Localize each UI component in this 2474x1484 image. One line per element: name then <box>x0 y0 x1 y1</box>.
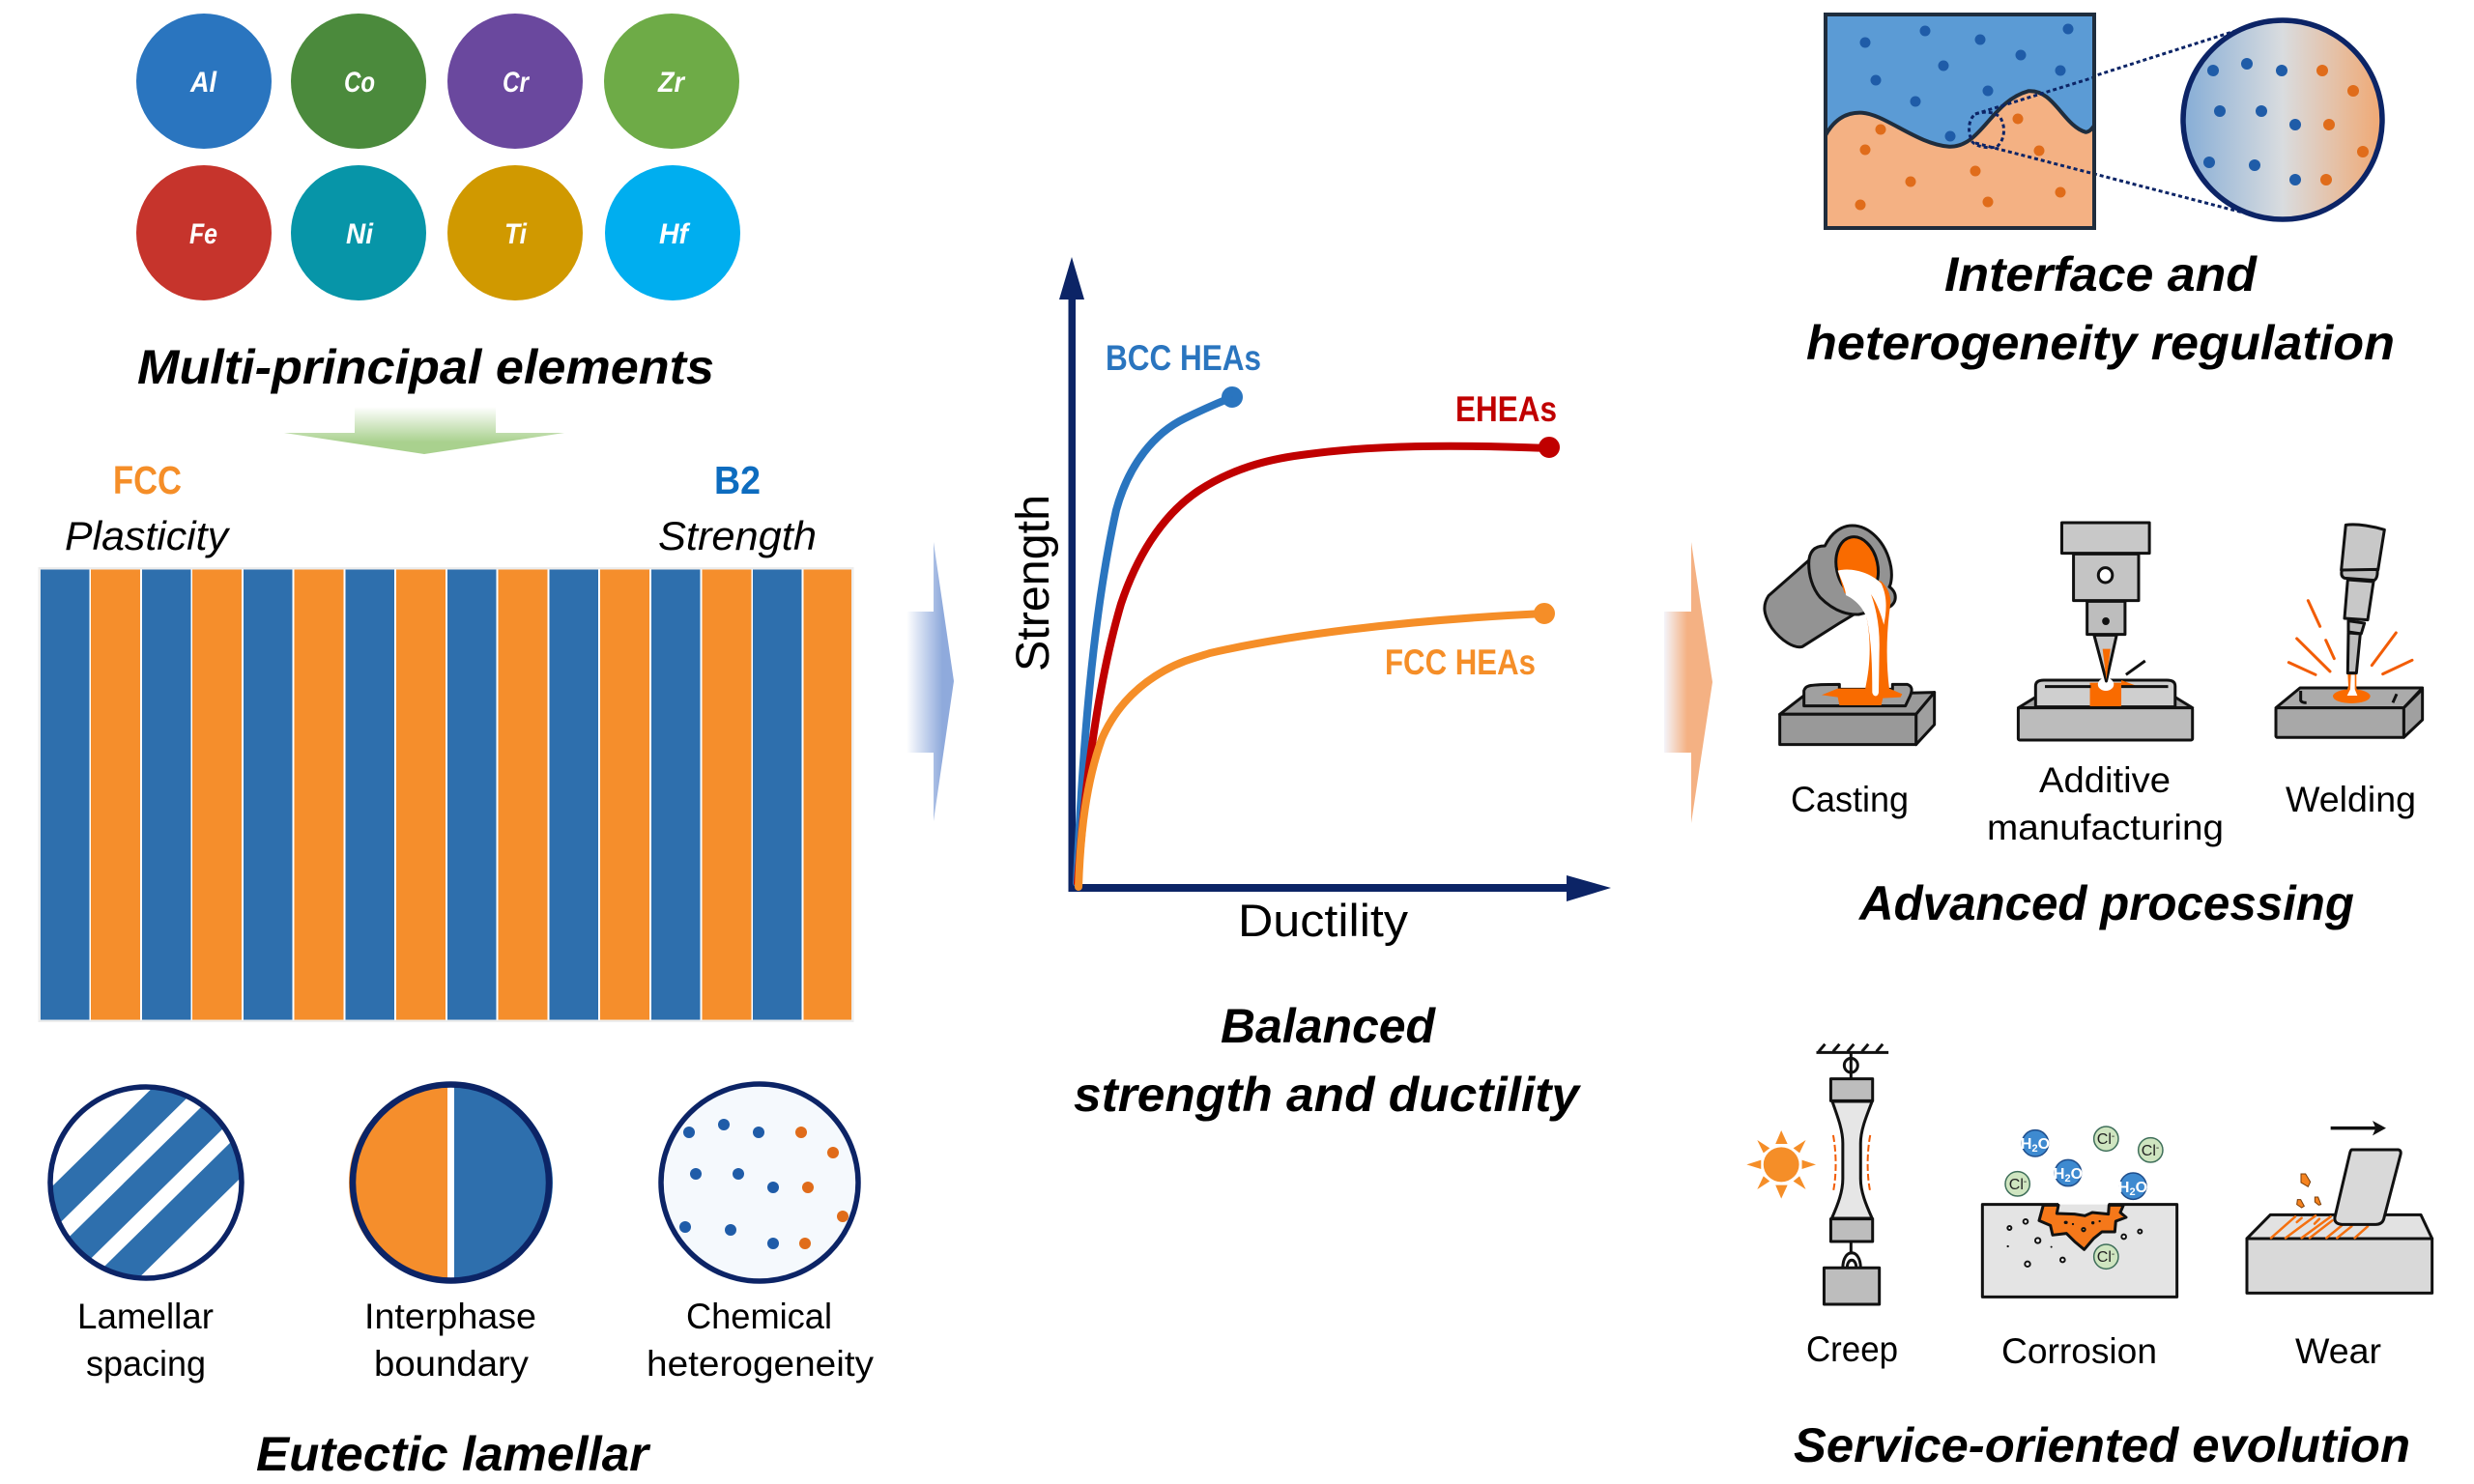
icon: corrosion: H <box>2021 1136 2031 1153</box>
icon: corrosion: O <box>2038 1136 2050 1153</box>
icon: wear <box>2247 1121 2432 1293</box>
label: Creep: Creep <box>1806 1329 1898 1369</box>
axis label: Ductility: Ductility <box>1238 895 1409 946</box>
curve: FCC HEAs <box>1079 609 1549 887</box>
label: Additive manufacturing: Additive <box>2039 760 2171 800</box>
arrow: orange right arrow <box>1664 542 1712 823</box>
label: FCC HEAs: FCC HEAs <box>1385 642 1536 682</box>
label: Lamellar spacing: spacing <box>86 1344 206 1384</box>
heading: eutectic lamellar: Eutectic lamellar <box>256 1427 651 1481</box>
icon: casting <box>1765 526 1935 745</box>
element circle: Zr: Zr <box>657 67 686 99</box>
panel: eutectic lamellar <box>0 458 875 1481</box>
arrow: blue right arrow <box>906 542 954 821</box>
icon: corrosion: - <box>2112 1249 2114 1260</box>
element circle: Co <box>291 14 426 149</box>
element circle: Ni <box>291 165 426 300</box>
element circle: Co: Co <box>344 67 375 99</box>
icon: corrosion: 2 <box>2064 1173 2071 1184</box>
zoomed interface circle <box>2183 20 2382 219</box>
element circle: Ni: Ni <box>346 218 374 250</box>
icon: additive manufacturing <box>2018 523 2193 740</box>
icon: corrosion: O <box>2136 1180 2147 1196</box>
interface box <box>1826 14 2094 228</box>
element circle: Ti: Ti <box>504 218 528 250</box>
lamellar stripes <box>39 567 854 1022</box>
icon: corrosion: Cl <box>2009 1177 2024 1193</box>
icon: lamellar spacing circle <box>47 1084 245 1281</box>
axis label: Strength: Strength <box>1008 495 1059 671</box>
icon: corrosion: 2 <box>2031 1143 2038 1155</box>
icon: corrosion: 2 <box>2129 1186 2136 1198</box>
element circle: Hf <box>605 165 740 300</box>
label: Welding: Welding <box>2286 780 2416 819</box>
element circle: Fe <box>136 165 272 300</box>
heading: balanced strength and ductility: Balanced <box>1221 999 1436 1053</box>
element circle: Al: Al <box>189 67 217 99</box>
panel: service-oriented evolution <box>1746 1044 2432 1472</box>
curve: EHEAs <box>1078 442 1554 883</box>
icon: corrosion: Cl <box>2142 1143 2156 1159</box>
icon: corrosion: Cl <box>2097 1131 2112 1148</box>
label: EHEAs: EHEAs <box>1455 389 1557 429</box>
icon: corrosion: Cl <box>2097 1249 2112 1266</box>
icon: corrosion: - <box>2024 1177 2027 1187</box>
icon: corrosion: - <box>2156 1143 2159 1154</box>
label: Additive manufacturing: manufacturing <box>1987 808 2224 847</box>
label: Chemical heterogeneity: heterogeneity <box>647 1344 875 1384</box>
heading: interface and heterogeneity regulation: heterogeneity regulation <box>1806 316 2395 370</box>
icon: corrosion <box>1982 1127 2177 1297</box>
heading: multi-principal elements: Multi-principal elements <box>137 340 714 394</box>
label: Interphase boundary: boundary <box>374 1344 530 1384</box>
label: Strength: Strength <box>658 513 817 558</box>
icon: creep <box>1746 1044 1888 1304</box>
element circle: Cr <box>447 14 583 149</box>
curve: BCC HEAs <box>1077 392 1237 883</box>
element circle: Hf: Hf <box>659 218 691 250</box>
label: Wear: Wear <box>2295 1331 2381 1371</box>
icon: corrosion: H <box>2118 1180 2129 1196</box>
arrow: green down arrow <box>284 407 564 454</box>
label: Chemical heterogeneity: Chemical <box>686 1297 832 1336</box>
heading: service-oriented evolution: Service-oriented evolution <box>1794 1418 2410 1472</box>
heading: advanced processing: Advanced processing <box>1857 876 2354 930</box>
icon: interphase boundary circle <box>349 1084 553 1281</box>
element circle: Fe: Fe <box>189 218 217 250</box>
label: FCC: FCC <box>113 458 182 502</box>
element circle: Cr: Cr <box>503 67 531 99</box>
panel: advanced processing <box>1765 523 2423 930</box>
label: BCC HEAs: BCC HEAs <box>1106 338 1261 378</box>
heading: interface and heterogeneity regulation: Interface and <box>1944 247 2258 301</box>
label: Lamellar spacing: Lamellar <box>77 1297 214 1336</box>
icon: corrosion: O <box>2071 1166 2083 1183</box>
icon: welding <box>2276 525 2423 737</box>
chart axes <box>1059 257 1611 901</box>
icon: corrosion: H <box>2054 1166 2064 1183</box>
label: B2: B2 <box>714 458 761 502</box>
heading: balanced strength and ductility: strength and ductility <box>1074 1068 1581 1122</box>
element circle: Al <box>136 14 272 149</box>
label: Casting: Casting <box>1791 780 1909 819</box>
label: Interphase boundary: Interphase <box>364 1297 536 1336</box>
icon: chemical heterogeneity circle <box>661 1084 858 1281</box>
panel: strength-ductility chart <box>1008 257 1611 1122</box>
dotted zoom guide lines <box>1975 31 2243 213</box>
label: Plasticity: Plasticity <box>65 513 231 558</box>
panel: interface and heterogeneity regulation <box>1806 14 2395 370</box>
element circle: Zr <box>604 14 739 149</box>
icon: corrosion: - <box>2112 1131 2114 1142</box>
label: Corrosion: Corrosion <box>2001 1331 2157 1371</box>
element circle: Ti <box>447 165 583 300</box>
panel: multi-principal elements <box>136 14 740 394</box>
